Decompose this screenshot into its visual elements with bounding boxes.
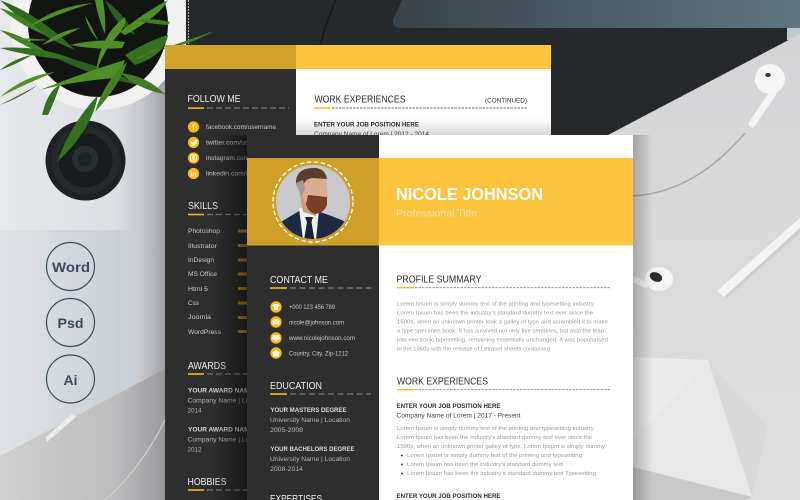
badge: Psd: Psd — [58, 315, 84, 331]
section: awards: YOUR AWARD NAME — [188, 426, 255, 434]
section: awards: YOUR AWARD NAME — [188, 388, 255, 394]
section: profile summary — [396, 274, 610, 352]
header band left — [247, 158, 379, 246]
section: education: YOUR MASTERS DEGREE — [270, 407, 347, 414]
section: skills: Photoshop — [188, 229, 221, 235]
plant leaves — [0, 0, 214, 115]
section: work experiences continued: (CONTINUED) — [485, 98, 527, 104]
section: work experiences: Lorem Ipsum has been the industry's standard dummy text ever since the — [397, 435, 592, 441]
section: profile summary: 1500s, when an unknown printer took a galley of type and scrambled it to make — [397, 320, 608, 326]
section: profile summary: Lorem Ipsum has been the industry's standard dummy text ever since the — [397, 310, 593, 316]
portrait photo — [273, 162, 353, 245]
section: follow me: FOLLOW ME — [188, 93, 240, 105]
front right column — [379, 135, 633, 500]
section: contact me: www.nicolejohnson.com — [288, 336, 355, 342]
back sheet header band — [165, 45, 551, 69]
back resume sheet — [165, 45, 551, 500]
section: work experiences continued — [314, 94, 527, 138]
section: hobbies — [188, 476, 247, 491]
section: profile summary: Lorem Ipsum is simply dummy text of the printing and typesetting industry. — [397, 302, 595, 308]
pencil stick — [717, 218, 800, 298]
section: work experiences: Company Name of Lorem | 2017 - Present — [396, 412, 521, 420]
section: education: EDUCATION — [270, 380, 322, 392]
section: work experiences — [396, 376, 610, 500]
section: work experiences continued: WORK EXPERIENCES — [314, 94, 406, 106]
section: work experiences continued: Company Name of Lorem | 2012 - 2014 — [314, 131, 429, 138]
section: skills: InDesign — [188, 258, 214, 264]
section: awards — [188, 360, 268, 454]
section: work experiences: 1500s, when an unknown printer galley of type. Lorem Ipsum is simply dummy — [397, 444, 605, 450]
section: follow me: facebook.com/username — [206, 125, 277, 131]
section: education — [270, 380, 371, 473]
camera lens — [46, 95, 126, 200]
professional title: Professional Title — [396, 208, 477, 220]
back sheet left column — [165, 69, 296, 500]
front resume sheet — [247, 135, 653, 500]
paper pyramid — [633, 357, 768, 500]
section: education: YOUR BACHELORS DEGREE — [270, 446, 355, 453]
section: follow me — [188, 93, 289, 179]
section: skills: Html 5 — [188, 287, 209, 293]
section: skills: WordPress — [188, 330, 221, 336]
earbud: upper — [633, 64, 785, 196]
section: education: 2008-2014 — [270, 466, 303, 473]
section: education: University Name | Location — [270, 456, 350, 463]
section: contact me: nicole@johnson.com — [289, 320, 344, 326]
section: profile summary: into electronic typesetting, remaining essentially unchanged. It was popularised — [397, 338, 608, 344]
earbud: lower — [633, 267, 673, 291]
section: skills: Css — [188, 301, 199, 307]
badge: Word — [46, 242, 94, 290]
section: contact me: Country, City, Zip-1212 — [289, 351, 349, 357]
section: follow me: in — [190, 171, 197, 178]
header band right — [379, 158, 633, 246]
notebook — [0, 230, 165, 500]
name: NICOLE JOHNSON — [396, 184, 543, 204]
section: skills: Illustrator — [188, 244, 217, 250]
section: skills: Joomla — [188, 315, 212, 321]
section: work experiences: Lorem Ipsum has been the industry's standard dummy text — [407, 462, 563, 468]
section: work experiences: Lorem Ipsum is simply dummy text of the printing and typesetting — [407, 453, 582, 459]
section: skills: MS Office — [188, 272, 218, 278]
section: contact me: CONTACT ME — [270, 274, 328, 286]
badge: Ai — [46, 355, 94, 403]
section: skills: SKILLS — [188, 200, 218, 212]
section: contact me — [270, 274, 371, 359]
section: profile summary: PROFILE SUMMARY — [396, 274, 482, 286]
section: work experiences continued: ENTER YOUR JOB POSITION HERE — [314, 122, 419, 128]
section: awards: 2012 — [188, 446, 202, 454]
back sheet right column — [296, 69, 551, 135]
section: contact me: +000 123 456 789 — [289, 305, 336, 311]
section: follow me: linkedin.com/username — [206, 172, 277, 178]
section: follow me: twitter.com/username — [206, 140, 273, 146]
section: follow me: instagram.com/username — [206, 156, 281, 162]
section: work experiences: ENTER YOUR JOB POSITION HERE — [396, 403, 500, 410]
section: awards: Company Name | Location — [188, 398, 268, 404]
badge: Psd — [46, 298, 94, 346]
section: hobbies: HOBBIES — [188, 476, 226, 488]
badge: Word: Word — [52, 259, 90, 275]
badge: Ai: Ai — [64, 372, 78, 388]
front left column — [247, 135, 379, 500]
section: education: 2005-2008 — [270, 427, 303, 434]
plant pot — [10, 0, 186, 110]
section: work experiences: Lorem Ipsum has been the industry's standard dummy text Typesetting — [407, 471, 596, 477]
section: awards: AWARDS — [188, 360, 226, 372]
section: awards: Company Name | Location — [188, 436, 268, 444]
section: skills — [188, 200, 247, 336]
section: education: University Name | Location — [270, 417, 350, 424]
section: work experiences: WORK EXPERIENCES — [397, 376, 488, 388]
section: profile summary: a type specimen book. It has survived not only five centuries, but also the leap — [397, 328, 604, 334]
section: work experiences: Lorem Ipsum is simply dummy text of the printing and typesetting industry. — [397, 426, 595, 432]
section: work experiences: ENTER YOUR JOB POSITION HERE — [396, 493, 500, 500]
section: profile summary: in the 1960s with the release of Letraset sheets containing — [397, 346, 550, 352]
section: follow me: f — [192, 123, 195, 132]
section: awards: 2014 — [188, 408, 202, 414]
